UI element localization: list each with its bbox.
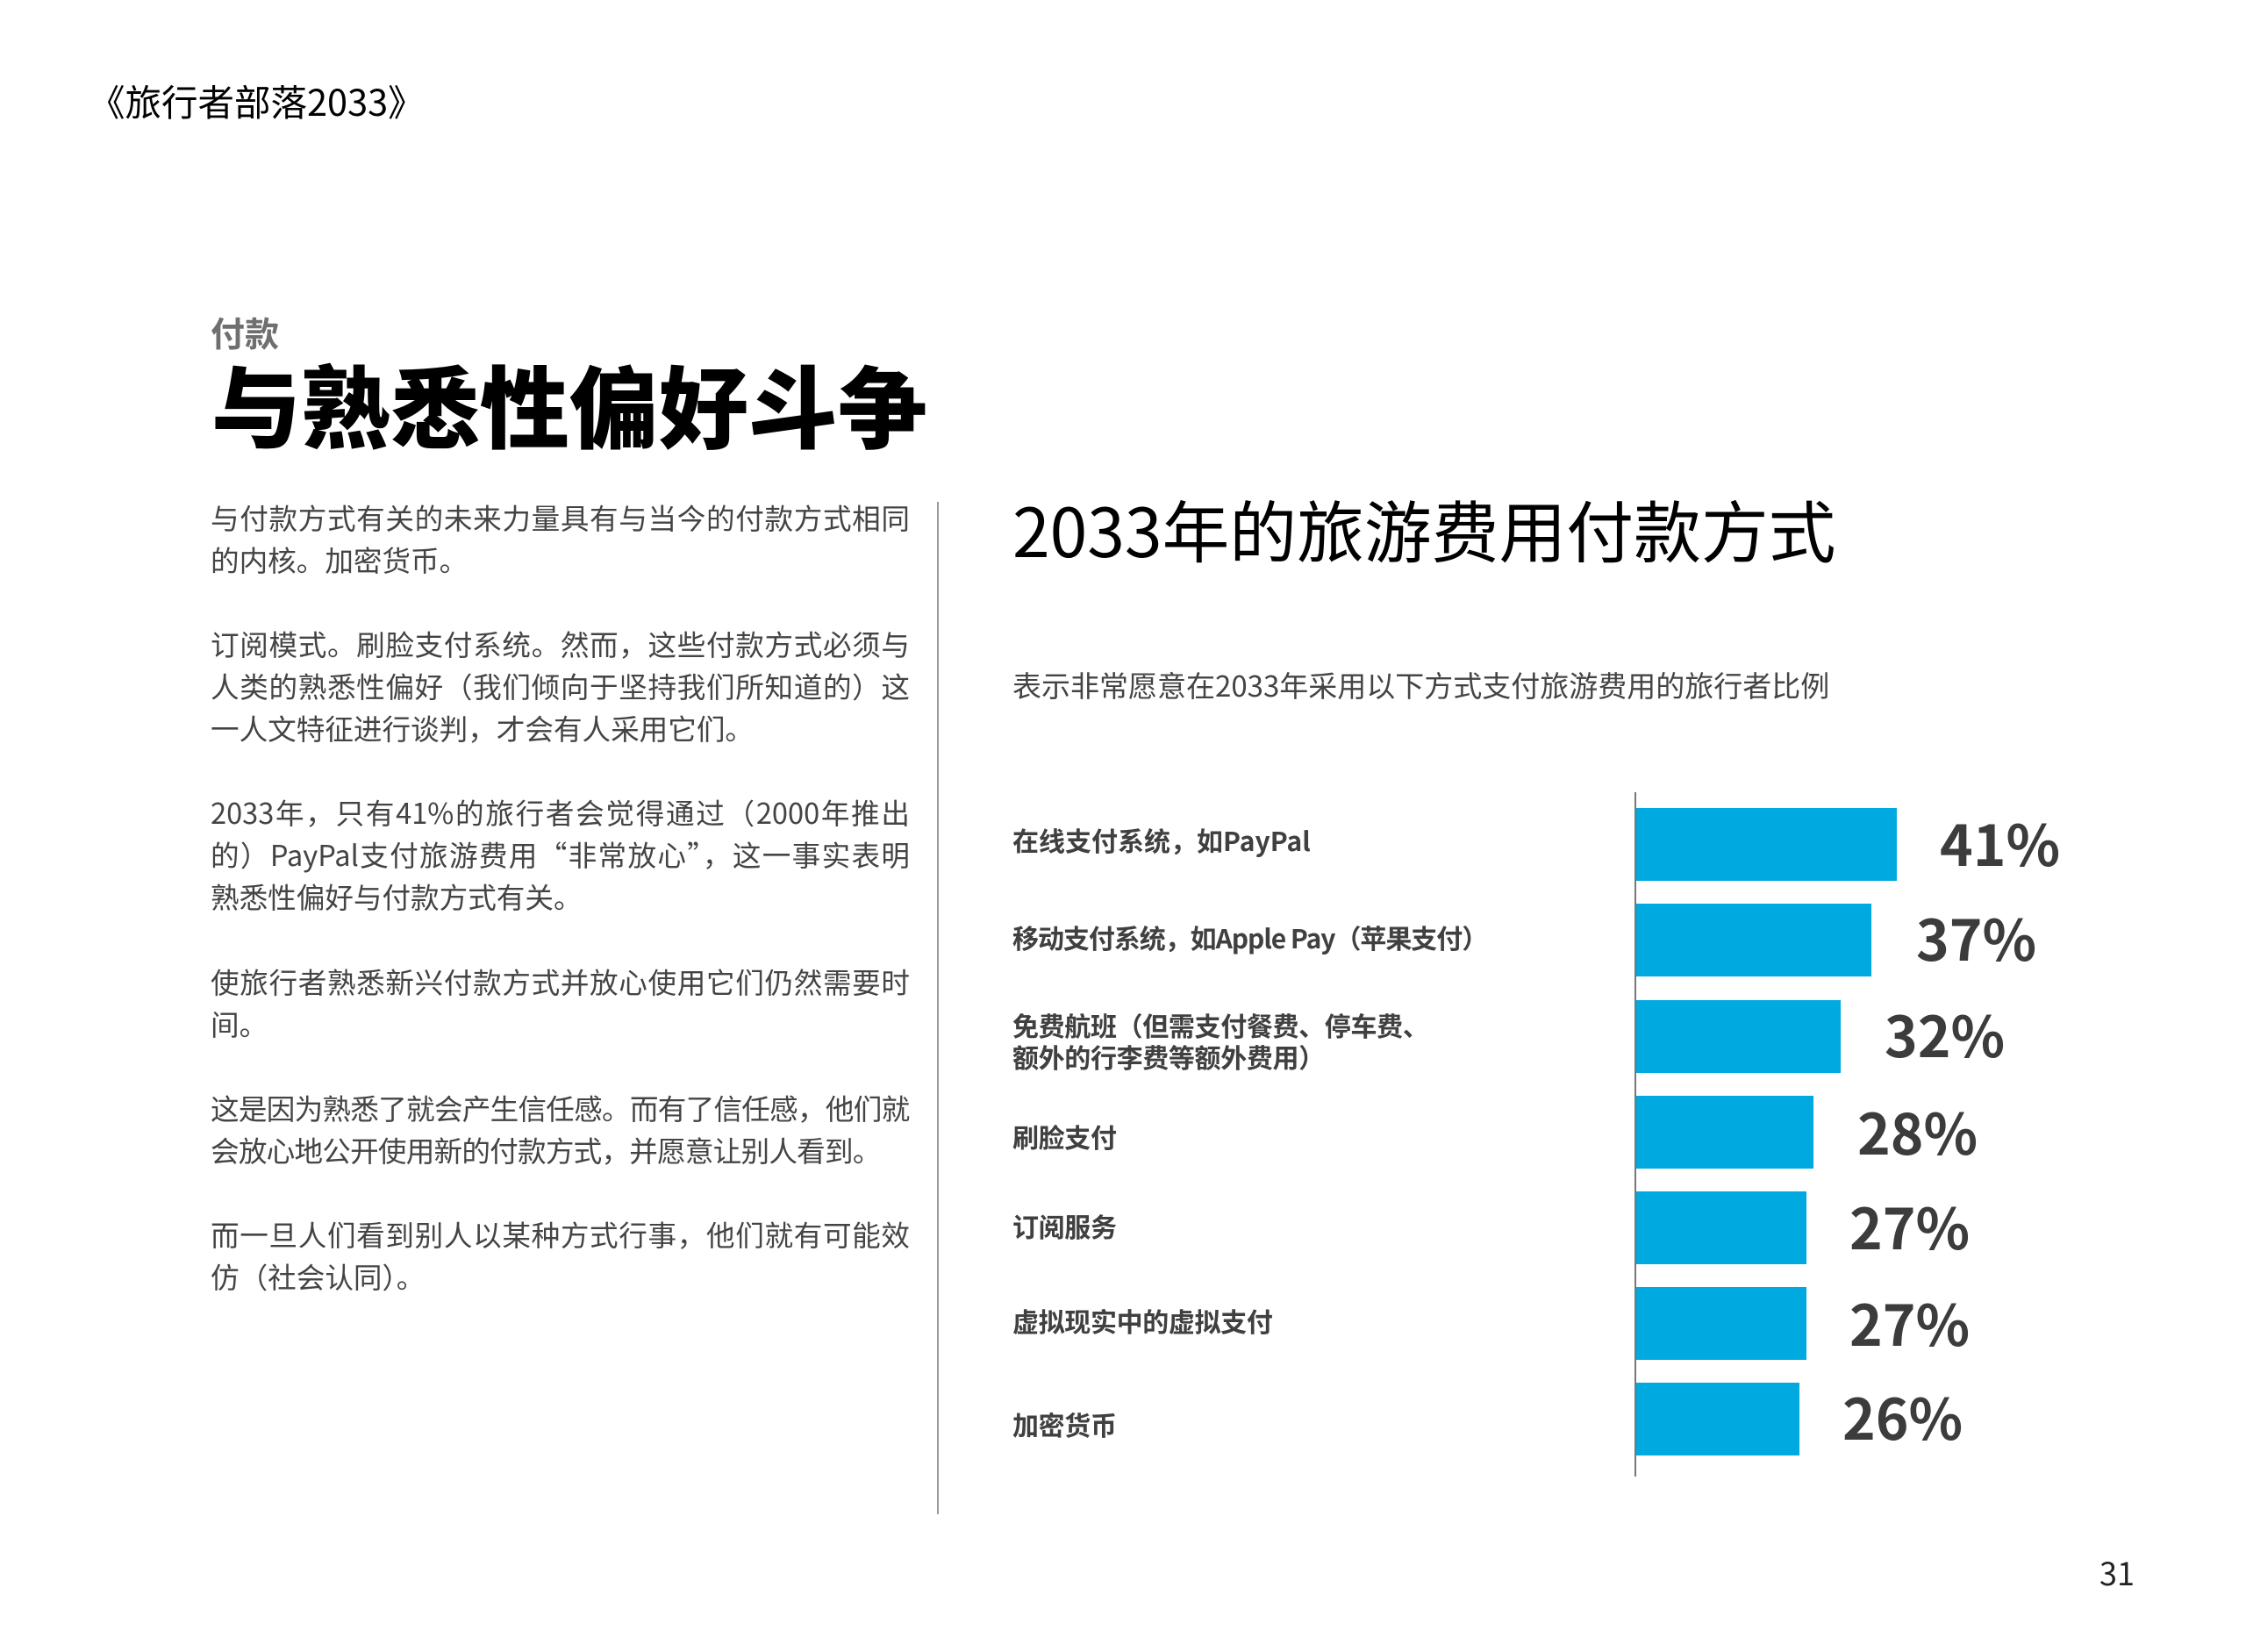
row: 免费航班 32%: 32% [1885, 993, 2005, 1074]
row: 在线支付系统 41%: 41% [1940, 802, 2060, 883]
body text: 订阅模式。刷脸支付系统。然而，这些付款方式必须与 [211, 623, 910, 664]
body text: 的内核。加密货币。 [211, 539, 468, 580]
row: 虚拟现实虚拟支付 27%: 虚拟现实中的虚拟支付 [1012, 1301, 1272, 1340]
row: 刷脸支付 28% [1012, 1091, 1978, 1171]
running header: 《旅行者部落2033》 [89, 74, 425, 126]
body text: 使旅行者熟悉新兴付款方式并放心使用它们仍然需要时 [211, 961, 910, 1002]
row: 免费航班 32%: 免费航班（但需支付餐费、停车费、 [1012, 1005, 1428, 1044]
chart title: 2033年的旅游费用付款方式 [1012, 480, 1835, 577]
row: 移动支付系统 37%: 37% [1916, 897, 2036, 977]
row: 虚拟现实虚拟支付 27% [1012, 1282, 1970, 1362]
section label: 付款 [211, 308, 279, 357]
body text: 一人文特征进行谈判，才会有人采用它们。 [211, 707, 754, 748]
body text: 熟悉性偏好与付款方式有关。 [211, 876, 583, 917]
row: 免费航班 32% [1012, 993, 2005, 1076]
chart axis [1634, 792, 1636, 1477]
row: 刷脸支付 28%: 28% [1857, 1091, 1978, 1171]
column divider [937, 502, 939, 1514]
row: 订阅服务 27% [1012, 1185, 1970, 1266]
body text [211, 497, 910, 1297]
body text: 而一旦人们看到别人以某种方式行事，他们就有可能效 [211, 1213, 910, 1255]
body text: 这是因为熟悉了就会产生信任感。而有了信任感，他们就 [211, 1087, 909, 1128]
row: 在线支付系统 41%: 在线支付系统，如PayPal [1012, 820, 1311, 859]
row: 虚拟现实虚拟支付 27%: 27% [1849, 1282, 1970, 1362]
row: 加密货币 26%: 加密货币 [1012, 1405, 1117, 1443]
body text: 会放心地公开使用新的付款方式，并愿意让别人看到。 [211, 1129, 881, 1170]
row: 在线支付系统 41% [1012, 802, 2060, 883]
row: 移动支付系统 37%: 移动支付系统，如Apple Pay（苹果支付） [1012, 918, 1487, 956]
body text: 间。 [211, 1003, 268, 1044]
row: 移动支付系统 37% [1012, 897, 2036, 977]
body text: 人类的熟悉性偏好（我们倾向于坚持我们所知道的）这 [211, 665, 910, 706]
row: 加密货币 26%: 26% [1842, 1376, 1963, 1456]
body text: 仿（社会认同）。 [211, 1255, 425, 1297]
row: 订阅服务 27%: 27% [1849, 1185, 1970, 1266]
body text: 与付款方式有关的未来力量具有与当今的付款方式相同 [211, 497, 910, 537]
main title: 与熟悉性偏好斗争 [211, 339, 927, 468]
chart subtitle: 表示非常愿意在2033年采用以下方式支付旅游费用的旅行者比例 [1012, 663, 1829, 705]
body text: 的）PayPal支付旅游费用“非常放心”，这一事实表明 [211, 833, 910, 875]
page number: 31 [2099, 1549, 2135, 1595]
row: 刷脸支付 28%: 刷脸支付 [1012, 1117, 1117, 1155]
row: 订阅服务 27%: 订阅服务 [1012, 1206, 1117, 1245]
row: 免费航班 32%: 额外的行李费等额外费用） [1012, 1037, 1325, 1076]
body text: 2033年，只有41%的旅行者会觉得通过（2000年推出 [211, 791, 910, 833]
